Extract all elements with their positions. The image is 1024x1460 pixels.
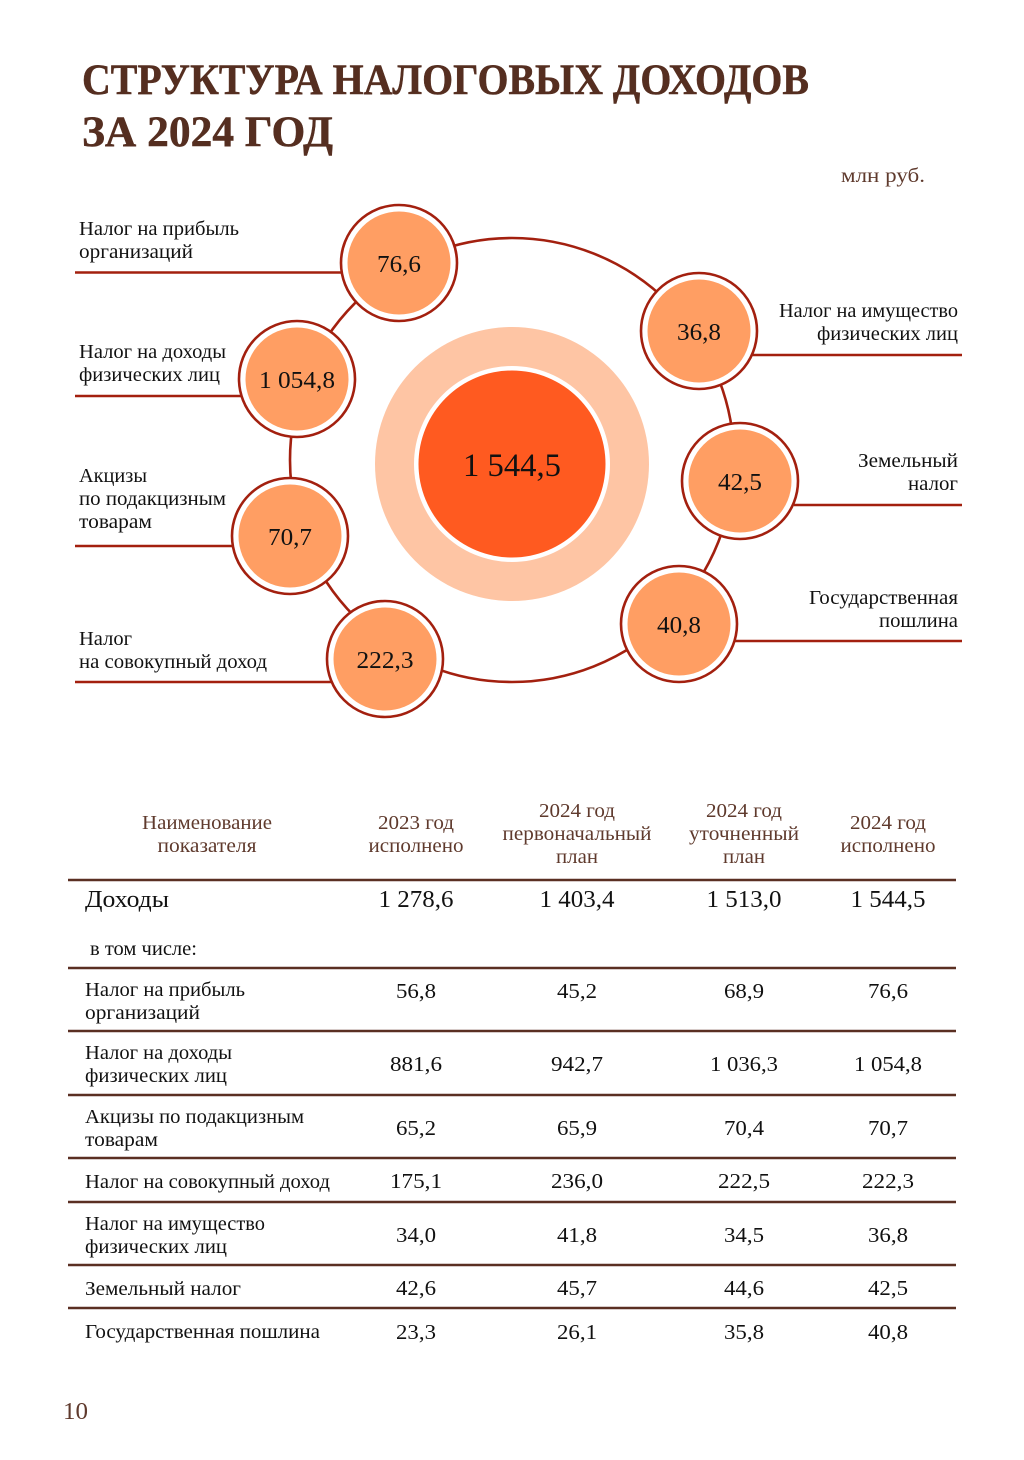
table header: Наименование: [142, 813, 272, 834]
row: personal property tax: [85, 1214, 908, 1258]
item: land tax: налог: [908, 474, 958, 495]
row: state duty: 40,8: [868, 1320, 908, 1344]
connecting ring: [290, 238, 734, 682]
item: aggregate income tax: Налог: [79, 629, 132, 650]
row: personal income tax: [85, 1043, 922, 1087]
title: СТРУКТУРА НАЛОГОВЫХ ДОХОДОВ: [82, 57, 809, 104]
item: state duty: Государственная: [809, 588, 958, 609]
table header: [142, 801, 936, 868]
row: land tax: 42,5: [868, 1276, 908, 1300]
row: excise: Акцизы по подакцизным: [85, 1107, 304, 1128]
table header: 2024 год: [850, 813, 926, 834]
item: state duty: пошлина: [879, 611, 958, 632]
data table: [68, 801, 956, 1344]
item: profit tax: [75, 205, 457, 321]
item: excise: товарам: [79, 512, 152, 533]
item: excise: [75, 466, 348, 594]
item: aggregate income tax: 222,3: [356, 648, 414, 674]
item: personal income tax: Налог на доходы: [79, 342, 226, 363]
title: ЗА 2024 ГОД: [82, 109, 333, 156]
row: aggregate income tax: 236,0: [551, 1169, 603, 1193]
row: personal property tax: физических лиц: [85, 1237, 227, 1258]
row: state duty: [85, 1320, 908, 1344]
row: aggregate income tax: 175,1: [390, 1169, 442, 1193]
row: profit tax: 76,6: [868, 979, 908, 1003]
item: excise: по подакцизным: [79, 489, 226, 510]
row: profit tax: Налог на прибыль: [85, 980, 245, 1001]
row: personal income tax: физических лиц: [85, 1066, 227, 1087]
ring diagram: [75, 205, 962, 717]
item: personal property tax: [641, 273, 962, 389]
item: excise: 70,7: [268, 525, 312, 551]
table header: исполнено: [840, 836, 936, 857]
row: land tax: 44,6: [724, 1276, 764, 1300]
item: state duty: 40,8: [657, 613, 701, 639]
row: personal income tax: 1 036,3: [710, 1052, 778, 1076]
row: total income: 1 513,0: [706, 887, 782, 913]
row: land tax: 45,7: [557, 1276, 597, 1300]
row: state duty: 35,8: [724, 1320, 764, 1344]
row: state duty: Государственная пошлина: [85, 1322, 320, 1343]
item: personal property tax: физических лиц: [817, 324, 958, 345]
item: land tax: Земельный: [858, 451, 958, 472]
item: personal income tax: [75, 321, 355, 437]
row: total income: [85, 887, 926, 913]
row: land tax: [85, 1276, 908, 1300]
central circle: total: 1 544,5: [463, 448, 561, 484]
row: personal income tax: 881,6: [390, 1052, 442, 1076]
row: aggregate income tax: Налог на совокупный доход: [85, 1172, 330, 1193]
table header: план: [556, 847, 598, 868]
item: personal property tax: Налог на имущество: [779, 301, 958, 322]
row: excise: товарам: [85, 1130, 158, 1151]
row: aggregate income tax: 222,5: [718, 1169, 770, 1193]
row: aggregate income tax: [85, 1169, 914, 1193]
table header: первоначальный: [502, 824, 652, 845]
item: aggregate income tax: [75, 601, 443, 717]
row: land tax: Земельный налог: [85, 1279, 241, 1300]
item: land tax: [682, 423, 962, 539]
row: profit tax: организаций: [85, 1003, 200, 1024]
row: excise: 70,7: [868, 1116, 908, 1140]
row: personal property tax: 36,8: [868, 1223, 908, 1247]
table header: показателя: [158, 836, 257, 857]
row: total income: 1 403,4: [540, 887, 614, 913]
row: total income: 1 278,6: [378, 887, 454, 913]
table header: 2023 год: [378, 813, 454, 834]
row: state duty: 23,3: [396, 1320, 436, 1344]
row: excise: 65,2: [396, 1116, 436, 1140]
table header: план: [723, 847, 765, 868]
row: profit tax: 68,9: [724, 979, 764, 1003]
table header: 2024 год: [539, 801, 615, 822]
row: total income: 1 544,5: [850, 887, 926, 913]
row: profit tax: 45,2: [557, 979, 597, 1003]
row: personal income tax: 942,7: [551, 1052, 603, 1076]
row: personal property tax: Налог на имущество: [85, 1214, 265, 1235]
row: total income: Доходы: [85, 887, 169, 913]
row: excise: 65,9: [557, 1116, 597, 1140]
row: personal property tax: 34,0: [396, 1223, 436, 1247]
item: profit tax: организаций: [79, 242, 193, 263]
item: personal income tax: физических лиц: [79, 365, 220, 386]
page number: 10: [63, 1399, 88, 1425]
row: profit tax: [85, 979, 908, 1024]
row: aggregate income tax: 222,3: [862, 1169, 914, 1193]
subheading: в том числе:: [90, 939, 197, 960]
table header: исполнено: [368, 836, 464, 857]
row: personal income tax: Налог на доходы: [85, 1043, 232, 1064]
table header: 2024 год: [706, 801, 782, 822]
row: personal income tax: 1 054,8: [854, 1052, 922, 1076]
row: excise: [85, 1107, 908, 1151]
row: personal property tax: 41,8: [557, 1223, 597, 1247]
row: profit tax: 56,8: [396, 979, 436, 1003]
table header: уточненный: [689, 824, 799, 845]
central circle: total: [375, 327, 649, 601]
item: land tax: 42,5: [718, 470, 762, 496]
item: state duty: [621, 566, 962, 682]
item: personal income tax: 1 054,8: [259, 368, 335, 394]
item: aggregate income tax: на совокупный доход: [79, 652, 267, 673]
item: profit tax: 76,6: [377, 252, 421, 278]
row: excise: 70,4: [724, 1116, 765, 1140]
item: excise: Акцизы: [79, 466, 147, 487]
title: [82, 57, 809, 156]
row: state duty: 26,1: [557, 1320, 597, 1344]
row: land tax: 42,6: [396, 1276, 436, 1300]
row: personal property tax: 34,5: [724, 1223, 764, 1247]
item: personal property tax: 36,8: [677, 320, 721, 346]
item: profit tax: Налог на прибыль: [79, 219, 239, 240]
unit label: млн руб.: [841, 166, 925, 187]
